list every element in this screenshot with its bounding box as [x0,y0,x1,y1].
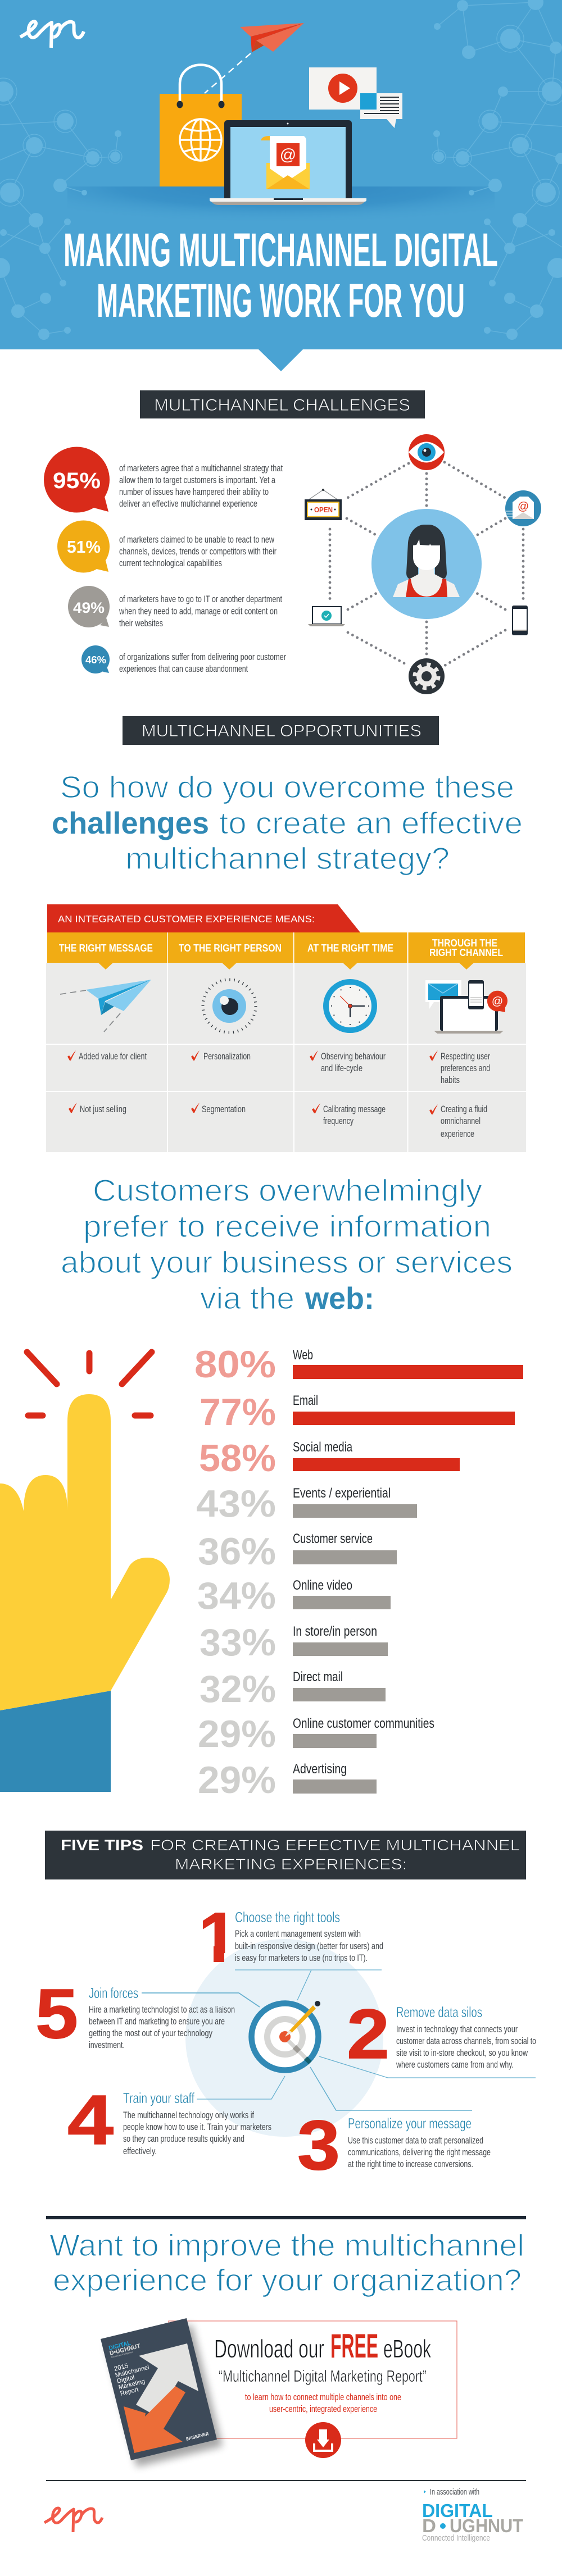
tip 3 [297,2106,491,2184]
text block [119,535,277,568]
row: benefits two: Creating a fluid [441,1104,487,1114]
heading: how do you overcome: challenges [52,805,209,840]
stat: 49 percent: 49% [73,599,105,616]
stat: 49 percent [68,586,282,629]
stat: 46 percent: 46% [85,654,106,666]
heading: how do you overcome [52,770,523,876]
row: web: Web [293,1348,313,1363]
tip 4: Train your staff [123,2090,195,2106]
row: benefits one: Personalization [203,1052,251,1062]
icon: mail: @ [518,500,529,513]
heading: how do you overcome: to create an effective [219,805,523,840]
row: benefits two: Calibrating message [323,1104,386,1114]
tip 3: communications, delivering the right message [348,2147,491,2158]
row: email [200,1391,515,1433]
heading: customers prefer the web: via the [200,1281,294,1316]
row: online communities: Online customer communities [293,1716,434,1731]
row: benefits one [67,1050,490,1085]
icon: laptop with email [210,120,366,205]
row: benefits two: Not just selling [80,1104,126,1114]
text block: current technological capabilities [119,558,222,568]
row: benefits one: habits [441,1075,460,1085]
text block [119,652,286,674]
heading bar: multichannel challenges [140,390,425,418]
divider: thick rule [46,2216,526,2219]
callout: download ebook [101,2318,457,2467]
text block: when they need to add, manage or edit content on [119,607,278,617]
email envelope and letter: @ [280,146,296,164]
row: in store: In store/in person [293,1624,377,1639]
stat: 51 percent: 51% [67,537,101,557]
row: web [194,1343,523,1386]
ebook cover: 2015 [114,2363,129,2373]
tip 2: Invest in technology that connects your [396,2024,518,2035]
tip 3: Personalize your message [348,2115,472,2132]
tip 4 [67,2081,271,2159]
decorative network nodes [0,0,562,340]
row: benefits one: preferences and [441,1063,490,1073]
callout text [214,2327,431,2414]
heading bar: five tips [45,1831,526,1879]
heading: customers prefer the web: Customers overwhelmingly [93,1173,483,1208]
icon: target with pencil [252,2001,320,2070]
row: online communities: 29% [198,1713,276,1755]
icon: red paper plane [240,23,304,52]
tip 5: Join forces [89,1985,138,2001]
heading: customers prefer the web [61,1173,513,1316]
divider: thin rule [46,2480,526,2481]
icon: phone [512,606,528,635]
row: benefits two: omnichannel [441,1116,481,1126]
title [64,224,498,327]
row: benefits one: Respecting user [441,1052,490,1062]
row: benefits two: experience [441,1129,474,1139]
tip 1: is easy for marketers to use (no trips to IT). [235,1953,368,1963]
ebook cover: D•UGHNUT [109,2343,141,2357]
tip 4: people know how to use it. Train your marketers [123,2122,271,2132]
text block: of marketers agree that a multichannel strategy that [119,463,283,474]
callout text: to learn how to connect multiple channels into one [245,2392,401,2402]
heading bar: five tips: MARKETING EXPERIENCES: [175,1856,407,1873]
partner credit: digital doughnut: D [422,2515,436,2536]
tip 3: at the right time to increase conversions. [348,2159,473,2169]
ebook cover: Digital [116,2374,135,2385]
ebook cover: Multichannel [115,2364,150,2379]
heading: customers prefer the web: prefer to receive information [83,1209,491,1244]
column header: at the right time [294,932,407,970]
icon: pointing hand [0,1352,170,1792]
icon: gear [409,658,445,694]
text block: channels, devices, trends or competitors with their [119,547,277,557]
panel: integrated customer experience table [46,904,526,1152]
tip 5: getting the most out of your technology [89,2028,213,2038]
icon: shopping bag with globe [160,65,242,186]
callout text: user-centric, integrated experience [269,2404,377,2414]
heading bar: five tips: FIVE TIPS [61,1837,143,1854]
column header: the right message: THE RIGHT MESSAGE [59,943,153,954]
icon: person in circle [371,509,482,619]
row: social media: 58% [199,1437,276,1480]
heading: improve the experience: Want to improve the multichannel [49,2228,524,2263]
text block: of marketers have to go to IT or another department [119,594,282,604]
tip 1: Pick a content management system with [235,1929,361,1939]
icon: mail [505,490,541,526]
stat: 46 percent [81,645,286,674]
header banner [0,0,562,371]
text block: deliver an effective multichannel experience [119,499,257,509]
red tag heading: AN INTEGRATED CUSTOMER EXPERIENCE MEANS: [58,913,315,925]
callout text: eBook [383,2334,431,2363]
tip 2: where customers came from and why. [396,2060,514,2070]
panel: five tips diagram [35,1899,536,2184]
stat: 95 percent: 95% [53,468,101,493]
row: online video: Online video [293,1578,352,1593]
heading: improve the experience [49,2228,524,2297]
row: email: Email [293,1393,318,1408]
column header: through the right channel: RIGHT CHANNEL [429,947,503,958]
bar chart: preferred channels [194,1343,523,1801]
text block [119,594,282,629]
callout text: Download our [214,2334,324,2363]
row: customer service: 36% [198,1530,276,1573]
globe [180,119,221,161]
row: direct mail: Direct mail [293,1669,343,1685]
icon: blue eye [203,980,256,1032]
partner credit: digital doughnut: UGHNUT [450,2515,523,2536]
ebook cover: Connected Intelligence [111,2350,134,2359]
row: benefits two: frequency [323,1116,354,1126]
icon: open sign: OPEN [314,506,333,514]
ebook cover [101,2318,223,2467]
row: benefits two [69,1103,487,1139]
tip 1 [203,1911,383,1963]
tip 4: effectively. [123,2146,157,2156]
ebook cover: DIGITAL [108,2340,132,2352]
heading bar: multichannel opportunities: MULTICHANNEL OPPORTUNITIES [142,722,422,740]
tip 1: built-in responsive design (better for users) and [235,1941,383,1951]
icon: open sign [305,489,342,520]
tip 5: investment. [89,2040,125,2050]
icon: download button [305,2422,341,2458]
row: online communities [198,1713,434,1755]
row: advertising: Advertising [293,1762,347,1777]
ebook cover: Marketing [118,2378,146,2391]
connector lines [142,1970,536,2110]
tip 2: Remove data silos [396,2004,482,2020]
heading: customers prefer the web: about your business or services [61,1245,513,1280]
row: direct mail [200,1668,386,1710]
row: online video [197,1574,391,1617]
row: benefits two: Segmentation [202,1104,246,1114]
row: social media [199,1437,460,1480]
heading: how do you overcome: multichannel strategy? [125,841,450,876]
tip 3: Use this customer data to craft personalized [348,2136,483,2146]
icon: blue paper plane [60,980,151,1032]
row: customer service [198,1530,397,1573]
partner credit: digital doughnut: Connected Intelligence [422,2533,490,2543]
text block: number of issues have hampered their ability to [119,487,269,497]
row: social media: Social media [293,1440,353,1455]
icon: dashed flight path [205,53,251,93]
stat: 51 percent [57,520,277,573]
row: benefits one: Added value for client [79,1052,147,1062]
logo: epi white [20,21,84,48]
column header: the right message [47,932,167,970]
column header: at the right time: AT THE RIGHT TIME [307,943,393,954]
column header: through the right channel: THROUGH THE [432,937,497,949]
ebook cover: Report [120,2386,139,2397]
attention rays [27,1352,152,1416]
tip 1: Choose the right tools [235,1909,340,1926]
row: in store: 33% [200,1621,276,1664]
heading bar: multichannel challenges: MULTICHANNEL CHALLENGES [154,396,410,415]
tip 3: 3 [297,2106,340,2184]
tip 4: 4 [67,2081,114,2159]
icon: devices channel: @ [492,995,503,1008]
row: customer service: Customer service [293,1531,373,1546]
tip 2: 2 [347,1995,389,2073]
channel network diagram [305,434,541,694]
row: events: Events / experiential [293,1486,391,1501]
partner credit: digital doughnut: In association with [430,2487,479,2497]
heading: how do you overcome: So how do you overcome these [60,770,514,804]
heading bar: multichannel opportunities [123,716,439,745]
text block: experiences that can cause abandonment [119,664,248,674]
text block: allow them to target customers is important. Yet a [119,475,276,485]
heading: improve the experience: experience for your organization? [53,2263,522,2297]
row: email: 77% [200,1391,276,1433]
row: advertising [198,1759,377,1801]
row: benefits one: Observing behaviour [321,1052,386,1062]
tip 1: 1 [198,1899,238,1977]
text block: their websites [119,618,163,629]
tip 2 [347,1995,536,2073]
text block [119,463,283,509]
column header: to the right person [167,932,293,970]
stat: 95 percent [44,447,283,512]
tip 5: between IT and marketing to ensure you are [89,2017,225,2027]
partner credit: digital doughnut [422,2487,523,2543]
heading bar: five tips: FOR CREATING EFFECTIVE MULTICHANNEL [150,1837,520,1854]
tip 4: The multichannel technology only works if [123,2110,254,2120]
callout text: FREE [330,2327,378,2365]
heading: customers prefer the web: web: [305,1281,374,1316]
icon: clock [323,979,377,1033]
ebook cover: EPISERVER [185,2431,209,2442]
icon: video and document speech bubbles [309,67,402,128]
row: direct mail: 32% [200,1668,276,1710]
tip 5 [35,1975,235,2053]
callout text: “Multichannel Digital Marketing Report” [219,2368,427,2386]
text block: of marketers claimed to be unable to react to new [119,535,274,545]
column header: to the right person: TO THE RIGHT PERSON [179,943,282,954]
row: advertising: 29% [198,1759,276,1801]
tip 5: Hire a marketing technologist to act as a liaison [89,2005,235,2015]
red tag heading [47,904,360,932]
text block: of organizations suffer from delivering poor customer [119,652,286,662]
tip 4: so they can produce results quickly and [123,2134,244,2144]
logo: epi coral [44,2508,102,2532]
tip 5: 5 [35,1975,78,2053]
row: online video: 34% [197,1574,276,1617]
icon: small laptop [308,607,345,626]
row: events: 43% [196,1482,276,1525]
row: in store [200,1621,388,1664]
column header: through the right channel [408,932,525,970]
row: events [196,1482,417,1525]
email envelope and letter [261,136,310,189]
icon: devices channel [425,980,507,1034]
row: web: 80% [194,1343,276,1386]
partner credit: digital doughnut: DIGITAL [422,2500,493,2521]
row: benefits one: and life-cycle [321,1063,362,1073]
icon: eye [409,434,445,470]
